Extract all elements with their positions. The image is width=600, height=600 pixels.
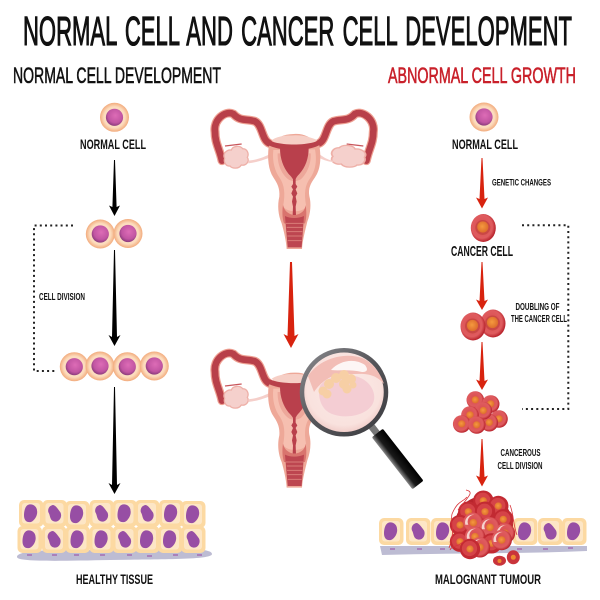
tumour	[449, 490, 520, 566]
label: cancer cell: CANCER CELL	[451, 243, 513, 260]
icon: four normal cells	[60, 352, 169, 381]
icon: magnifying glass	[302, 350, 423, 489]
label: cell division: CELL DIVISION	[39, 292, 85, 303]
icon: cancer cell	[471, 214, 496, 242]
icon: normal cell left	[100, 103, 129, 132]
bracket: doubling	[522, 225, 568, 409]
arrow: normal cell to two cells	[109, 160, 120, 216]
label: doubling of the cancer cell	[511, 302, 567, 325]
illustration: healthy uterus	[215, 113, 373, 249]
arrow: doubling to cluster	[476, 342, 488, 390]
label: healthy tissue: HEALTHY TISSUE	[76, 571, 153, 587]
label: cancerous cell division: CELL DIVISION	[498, 461, 542, 472]
label: malognant tumour: MALOGNANT TUMOUR	[435, 571, 541, 587]
arrow: cancer cell to doubling	[476, 262, 488, 310]
icon: doubled cancer cells	[460, 310, 506, 340]
healthy tissue	[17, 500, 212, 561]
bracket: cell division	[34, 226, 73, 371]
label: genetic changes: GENETIC CHANGES	[492, 178, 551, 188]
arrow: center red	[284, 262, 298, 348]
arrow: four cells to healthy tissue	[108, 387, 120, 494]
label: cancerous cell division	[498, 448, 542, 472]
arrow: two cells to four cells	[108, 250, 120, 346]
illustration: uterus with tumour	[215, 353, 333, 488]
arrow: cluster to tumour	[476, 439, 488, 486]
heading: normal cell development: NORMAL CELL DEVELOPMENT	[13, 63, 221, 88]
label: cancerous cell division: CANCEROUS	[500, 448, 541, 459]
icon: cancer cell cluster	[453, 391, 508, 434]
arrow: normal to cancer cell	[476, 158, 488, 208]
label: normal cell left: NORMAL CELL	[80, 136, 146, 152]
label: doubling of the cancer cell: DOUBLING OF	[516, 302, 560, 313]
label: normal cell right: NORMAL CELL	[452, 136, 518, 152]
malignant tumour tissue	[379, 518, 587, 555]
icon: normal cell right	[470, 102, 498, 132]
icon: two normal cells	[86, 219, 142, 248]
